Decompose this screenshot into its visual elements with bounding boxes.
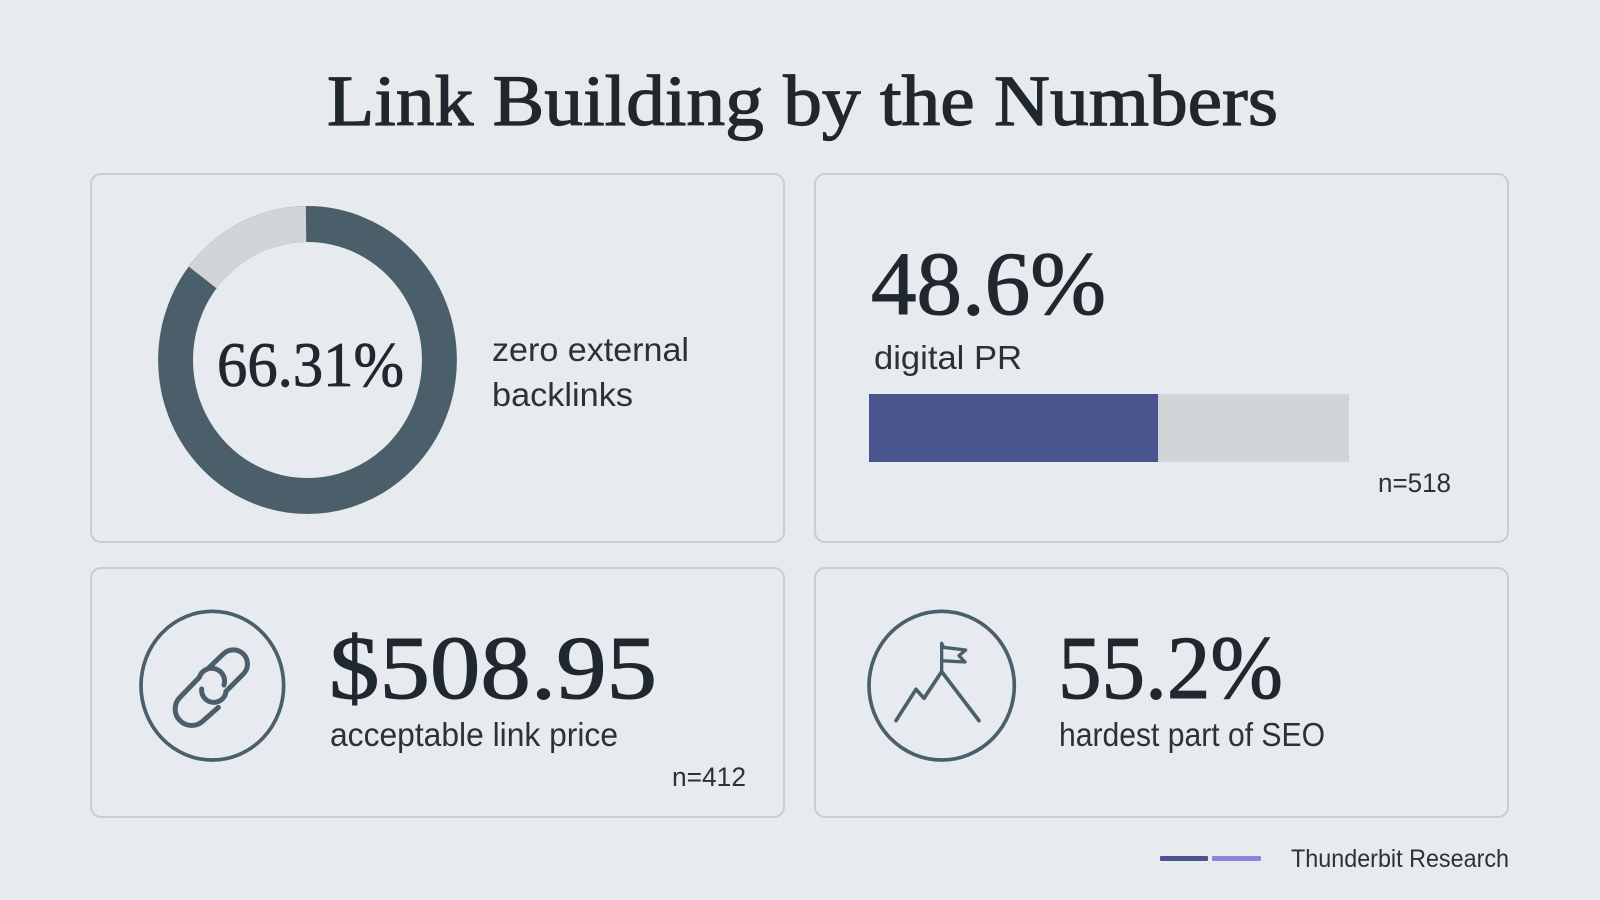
SEO label: hardest part of SEO — [1059, 716, 1325, 753]
panel: acceptable link price — [91, 568, 784, 817]
SEO value: 55.2% — [1058, 619, 1283, 718]
panel background — [815, 174, 1508, 542]
progress bar: 48.6% — [869, 394, 1349, 462]
sample size n=518: n=518 — [1378, 468, 1451, 498]
accent lines — [1160, 856, 1261, 861]
panel background — [91, 174, 784, 542]
icon: mountain with flag — [869, 611, 1014, 760]
footer source — [1160, 845, 1509, 873]
donut label: backlinks — [492, 376, 633, 413]
digital PR value: 48.6% — [871, 235, 1106, 334]
panel background — [91, 568, 784, 817]
panel: hardest part of SEO — [815, 568, 1508, 817]
icon: chain link — [141, 611, 284, 760]
digital PR label: digital PR — [874, 339, 1022, 376]
price label: acceptable link price — [330, 716, 618, 753]
source text: Thunderbit Research — [1291, 845, 1509, 873]
title: Link Building by the Numbers — [327, 61, 1278, 141]
panel: zero external backlinks — [91, 174, 784, 542]
donut label — [492, 331, 689, 413]
price value: $508.95 — [329, 619, 657, 718]
donut label: zero external — [492, 331, 689, 368]
panel background — [815, 568, 1508, 817]
panel: digital PR — [815, 174, 1508, 542]
sample size n=412: n=412 — [672, 762, 746, 792]
donut value: 66.31% — [217, 329, 404, 400]
donut chart: 66.31% — [176, 224, 439, 496]
